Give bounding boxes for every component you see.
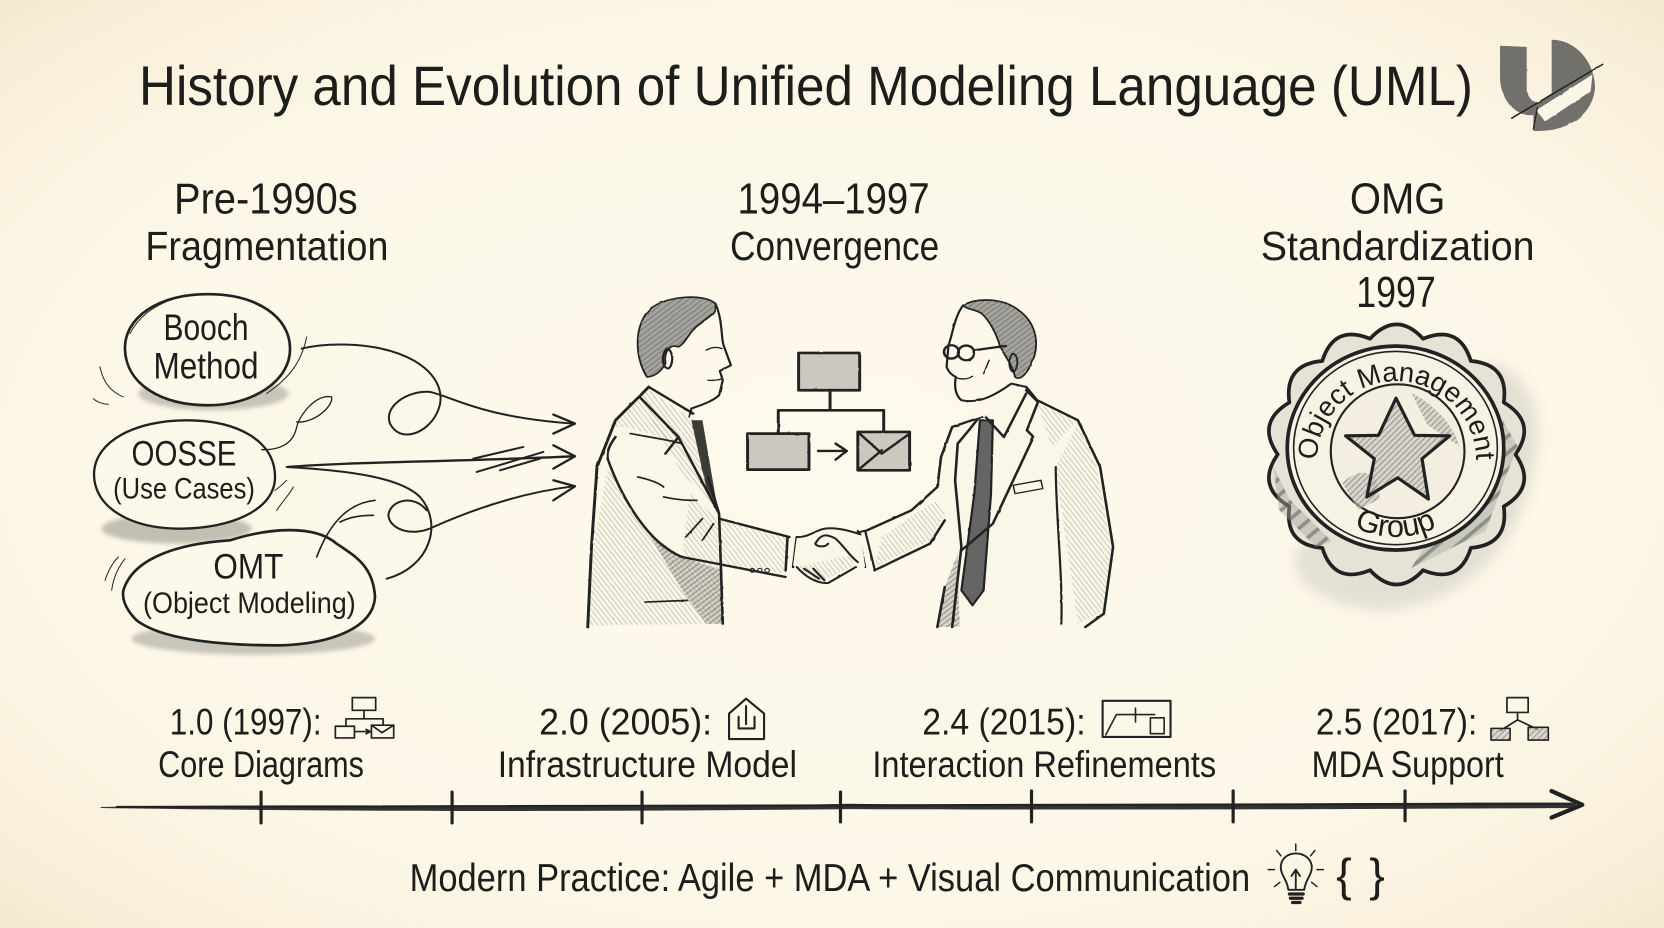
arrow: OOSSE to convergence <box>288 445 575 472</box>
icon: class hierarchy <box>335 698 394 738</box>
method bubbles and merging arrows <box>93 294 575 655</box>
heading: pre-1990s: Pre-1990s <box>174 175 358 223</box>
handshake <box>793 528 865 583</box>
milestone 2.4: 2.4 (2015): <box>922 701 1086 743</box>
icon: curly braces: { } <box>1336 849 1385 901</box>
icon: house package <box>729 699 764 739</box>
bubble: OMT (Object Modeling): (Object Modeling) <box>143 587 356 620</box>
panel: 1994-1997 convergence <box>588 175 1113 627</box>
seal ring text <box>1298 364 1494 539</box>
milestone 2.4 <box>872 701 1216 785</box>
milestone 2.5: MDA Support <box>1312 743 1504 785</box>
arrow: OMT to convergence <box>287 467 575 579</box>
heading: OMG standardization 1997 <box>1261 175 1535 317</box>
heading: OMG standardization 1997: Standardization <box>1261 223 1535 269</box>
heading: OMG standardization 1997: 1997 <box>1356 269 1436 317</box>
icon: model hierarchy <box>1491 698 1548 740</box>
icon: sketched UML logo <box>1500 40 1603 131</box>
bubble: Booch Method: Method <box>154 345 259 387</box>
milestone 2.0 <box>498 699 797 785</box>
closing line: modern practice: Modern Practice: Agile + MDA + Visual Communication <box>410 856 1250 900</box>
panel: version timeline <box>101 698 1582 823</box>
bubble: Booch Method <box>93 294 307 410</box>
milestone 1.0 <box>158 698 394 785</box>
icon: glasses <box>944 345 1006 360</box>
timeline axis with ticks and arrow <box>101 791 1582 823</box>
illustration: two men shaking hands <box>588 297 1113 627</box>
title: History and Evolution of Unified Modeling Language (UML) <box>139 55 1473 117</box>
milestone 1.0: Core Diagrams <box>158 743 364 785</box>
heading: pre-1990s: Fragmentation <box>145 223 388 269</box>
panel: OMG standardization <box>1261 175 1540 613</box>
panel: pre-1990s fragmentation <box>93 175 575 655</box>
squiggles from bubbles <box>262 397 375 557</box>
milestone 2.5 <box>1312 698 1548 785</box>
bubble: OMT (Object Modeling): OMT <box>213 548 283 587</box>
heading: pre-1990s <box>145 175 388 269</box>
icon: lightbulb <box>1268 844 1323 903</box>
bubble: OOSSE (Use Cases) <box>94 420 293 544</box>
bubble: OOSSE (Use Cases): OOSSE <box>132 434 237 473</box>
heading: OMG standardization 1997: OMG <box>1350 175 1445 223</box>
seal: Object Management Group <box>1267 322 1540 613</box>
icon: sequence frame <box>1103 701 1171 737</box>
heading: convergence <box>730 175 939 269</box>
bubble: OOSSE (Use Cases): (Use Cases) <box>113 473 255 506</box>
milestone 2.0: Infrastructure Model <box>498 743 797 785</box>
heading: convergence: Convergence <box>730 223 939 269</box>
seal ring text: Object Management <box>1298 364 1494 460</box>
bubble: OMT (Object Modeling) <box>105 530 375 655</box>
icon: UML class diagram <box>748 353 910 470</box>
milestone 2.5: 2.5 (2017): <box>1316 701 1477 743</box>
arrow: Booch to convergence <box>302 344 575 435</box>
seal ring text: Group <box>1358 510 1434 539</box>
milestone 2.4: Interaction Refinements <box>872 743 1216 785</box>
icon: star <box>1346 398 1450 499</box>
figure: left man <box>588 297 797 627</box>
bubble: Booch Method: Booch <box>164 306 249 348</box>
milestone 1.0: 1.0 (1997): <box>170 701 322 743</box>
figure: right man <box>858 300 1113 627</box>
heading: convergence: 1994–1997 <box>738 175 930 223</box>
milestone 2.0: 2.0 (2005): <box>539 701 712 743</box>
